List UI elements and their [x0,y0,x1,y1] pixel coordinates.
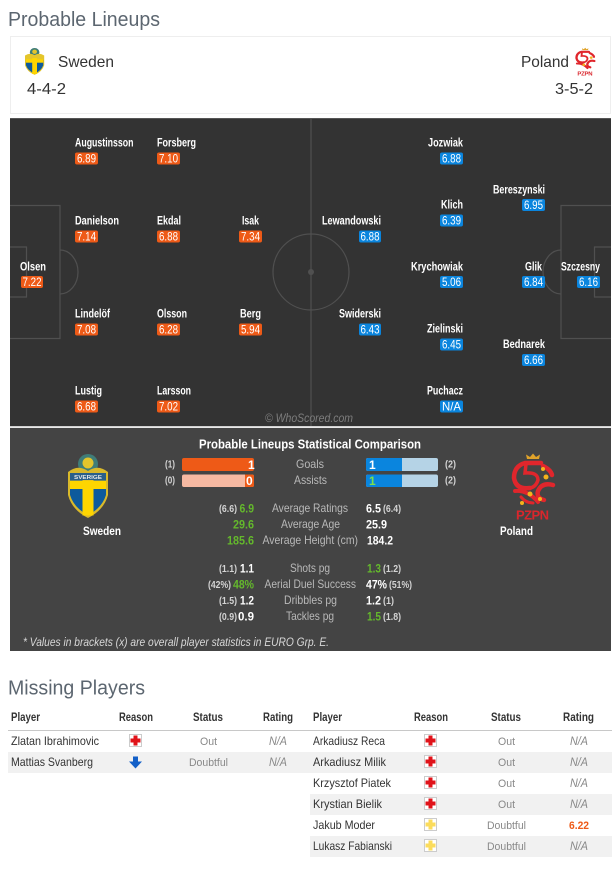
player: Klich: 6.39 [442,214,461,228]
formation: Sweden: 4-4-2 [27,81,66,98]
team name: Poland: Poland [521,54,569,71]
player: Olsson [157,306,187,337]
player: Ekdal [157,214,181,244]
player: Szczesny: Szczesny [561,260,600,274]
player: Swiderski [339,306,381,337]
panel: pitch [10,118,611,428]
player: Lindelöf: Lindelöf [75,306,111,320]
player: Bednarek: 6.66 [524,353,543,367]
player: Lindelöf: 7.08 [77,323,96,337]
player: Lindelöf [75,306,111,337]
player: Larsson: Larsson [157,384,191,398]
player: Isak: Isak [242,214,259,228]
Sweden players [20,136,262,414]
player: Jozwiak [428,136,463,166]
player: Puchacz: N/A [442,400,461,414]
row: Lukasz Fabianski: Doubtful [487,841,526,853]
player: Lewandowski: Lewandowski [322,214,381,228]
row: Zlatan Ibrahimovic: N/A [269,734,287,748]
player: Swiderski: 6.43 [360,323,380,337]
stat: dribbles per game: (1) [383,596,394,607]
bar: goals: Goals [296,457,324,471]
player: Jozwiak: 6.88 [442,152,461,166]
row: Arkadiusz Milik: N/A [570,755,588,769]
table header: Status [491,710,521,724]
player: Zielinski [427,322,463,352]
table: Sweden missing players [8,710,310,773]
player: Forsberg: 7.10 [159,152,178,166]
row: Krystian Bielik [313,797,588,811]
stat: average ratings: (6.6) [219,504,237,515]
row: Arkadiusz Reca [313,734,588,748]
stat: dribbles per game: Dribbles pg [284,593,337,607]
player: Augustinsson: 6.89 [77,152,96,166]
heading: probable lineups: Probable Lineups [8,9,160,31]
row: Krzysztof Piatek: Out [498,778,515,790]
bar: goals [165,457,456,472]
bar: goals: (2) [445,460,456,470]
player: Danielson [75,214,119,244]
player: Danielson: Danielson [75,214,119,228]
stat: dribbles per game: (1.5) [219,596,237,607]
stat: average ratings: 6.9 [240,502,254,516]
row: Mattias Svanberg: N/A [269,755,287,769]
row: Krzysztof Piatek [313,776,588,790]
player: Larsson: 7.02 [159,400,178,414]
player: Swiderski: Swiderski [339,306,381,320]
row: Lukasz Fabianski [313,839,588,853]
player: Forsberg [157,136,196,166]
stat: shots per game [219,561,401,576]
player: Ekdal: Ekdal [157,214,181,228]
stat: aerial duel success: (42%) [208,580,231,591]
row: Krystian Bielik: Krystian Bielik [313,797,383,811]
stat: shots per game: 1.1 [240,562,254,576]
panel: team header card [10,36,610,114]
heading: comparison title: Probable Lineups Statistical Comparison [199,436,421,452]
player: Puchacz [427,384,463,414]
icon: Sweden crest small [25,48,44,75]
table header: Rating [263,710,293,724]
watermark: © WhoScored.com [265,411,353,425]
player: Olsen: 7.22 [22,275,42,289]
stat: shots per game: Shots pg [290,561,330,575]
player: Lustig [75,384,102,414]
row: Jakub Moder: 6.22 [569,820,589,832]
team name: Sweden: Sweden [58,54,114,71]
player: Bereszynski [493,182,545,212]
row: Lukasz Fabianski: Lukasz Fabianski [313,839,392,853]
player: Ekdal: 6.88 [159,230,178,244]
player: Olsen: Olsen [20,260,46,274]
row: Arkadiusz Reca: Arkadiusz Reca [313,734,385,748]
stat: tackles per game: 0.9 [238,610,254,624]
table header: Player [11,710,40,724]
player: Krychowiak: 5.06 [442,275,461,289]
player: Forsberg: Forsberg [157,136,196,150]
stat: aerial duel success: Aerial Duel Success [264,577,356,591]
Poland players [322,136,600,414]
row: Krystian Bielik: Out [498,799,515,811]
row: Zlatan Ibrahimovic: Zlatan Ibrahimovic [11,734,99,748]
player: Bereszynski: Bereszynski [493,182,545,196]
stat: tackles per game: Tackles pg [286,609,334,623]
stat: average ratings: (6.4) [383,504,401,515]
stat: tackles per game [219,609,401,624]
bar: goals: 1 [248,458,255,472]
player: Isak [239,214,262,244]
formation: Poland: 3-5-2 [555,81,593,98]
icon: Poland crest: PZPN [516,508,549,522]
icon: Sweden crest: SVERIGE [74,475,102,481]
player: Glik: Glik [525,260,542,274]
icon: Poland crest small [576,48,594,77]
player: Lewandowski: 6.88 [360,230,380,244]
stat: dribbles per game [219,593,394,608]
stat: tackles per game: 1.5 [367,610,381,624]
stat: average age: 25.9 [366,518,387,532]
label: Sweden: Sweden [83,524,121,538]
player: Isak: 7.34 [241,230,260,244]
row: Jakub Moder: Doubtful [487,820,526,832]
stat: shots per game: (1.1) [219,564,237,575]
player: Augustinsson [75,136,134,166]
stat: average height: Average Height (cm) [262,533,358,547]
stat: average height [227,533,393,548]
table header: Player [313,710,342,724]
player: Krychowiak: Krychowiak [411,260,463,274]
player: Puchacz: Puchacz [427,384,463,398]
player: Jozwiak: Jozwiak [428,136,463,150]
icon: Poland crest [514,454,553,522]
bar: assists [165,473,456,488]
player: Bednarek [503,337,545,367]
stat: aerial duel success [208,577,412,592]
stat: tackles per game: (1.8) [383,612,401,623]
heading: missing players: Missing Players [8,678,145,700]
table: Poland missing players [310,710,612,857]
stat: average ratings [219,501,401,516]
player: Lustig: Lustig [75,384,102,398]
row: Mattias Svanberg: Mattias Svanberg [11,755,93,769]
bar: assists: 1 [369,474,376,488]
bar: assists: (0) [165,476,175,486]
row: Jakub Moder [313,818,589,832]
player: Berg [239,306,262,337]
player: Augustinsson: Augustinsson [75,136,134,150]
stat: average height: 184.2 [367,534,393,548]
stat: shots per game: 1.3 [367,562,381,576]
row: Krzysztof Piatek: N/A [570,776,588,790]
stat: average ratings: 6.5 [366,502,381,516]
row: Zlatan Ibrahimovic [11,734,287,748]
stat: average ratings: Average Ratings [272,501,348,515]
player: Krychowiak [411,260,463,289]
row: Mattias Svanberg: Doubtful [189,757,228,769]
bar: assists: 0 [246,474,253,488]
stat: average height: 185.6 [227,534,254,548]
player: Olsson: 6.28 [159,323,178,337]
bar: goals: (1) [165,460,175,470]
row: Krystian Bielik: N/A [570,797,588,811]
table header: Rating [563,710,594,724]
player: Larsson [157,384,191,414]
player: Glik [522,260,545,289]
stat: average age [233,517,387,532]
stat: shots per game: (1.2) [383,564,401,575]
table header: Reason [119,710,153,724]
stat: average age: 29.6 [233,518,254,532]
row: Arkadiusz Reca: Out [498,736,515,748]
panel: statistical comparison [10,428,611,651]
footnote: * Values in brackets (x) are overall player statistics in EURO Grp. E. [23,635,329,649]
bar: assists: (2) [445,476,456,486]
player: Szczesny: 6.16 [579,275,598,289]
stat: aerial duel success: 47% [366,578,387,592]
player: Szczesny [561,260,600,289]
row: Arkadiusz Reca: N/A [570,734,588,748]
player: Berg: 5.94 [241,323,260,337]
table header: Status [193,710,223,724]
player: Zielinski: 6.45 [442,338,461,352]
player: Danielson: 7.14 [77,230,96,244]
player: Olsen [20,260,46,289]
label: Poland: Poland [500,524,533,538]
player: Zielinski: Zielinski [427,322,463,336]
table header: Reason [414,710,448,724]
row: Arkadiusz Milik [313,755,588,769]
player: Lewandowski [322,214,381,244]
player: Bereszynski: 6.95 [524,198,543,212]
stat: average age: Average Age [281,517,340,531]
player: Bednarek: Bednarek [503,337,545,351]
row: Arkadiusz Milik: Arkadiusz Milik [313,755,387,769]
row: Lukasz Fabianski: N/A [570,839,588,853]
stat: dribbles per game: 1.2 [366,594,381,608]
table header [11,710,293,724]
table header [313,710,594,724]
player: Berg: Berg [240,306,261,320]
stat: aerial duel success: (51%) [389,580,412,591]
row: Zlatan Ibrahimovic: Out [200,736,217,748]
row: Krzysztof Piatek: Krzysztof Piatek [313,776,392,790]
stat: dribbles per game: 1.2 [240,594,254,608]
player: Lustig: 6.68 [77,400,96,414]
player: Klich: Klich [441,198,463,212]
row: Mattias Svanberg [11,755,287,769]
bar: assists: Assists [294,473,327,487]
bar: goals: 1 [369,458,376,472]
stat: aerial duel success: 48% [233,578,254,592]
icon: Poland crest small: PZPN [577,71,593,77]
player: Glik: 6.84 [524,275,543,289]
stat: tackles per game: (0.9) [219,612,237,623]
player: Olsson: Olsson [157,306,187,320]
icon: Sweden crest [68,454,108,518]
player: Klich [440,198,463,228]
row: Arkadiusz Milik: Out [498,757,515,769]
row: Jakub Moder: Jakub Moder [313,818,375,832]
